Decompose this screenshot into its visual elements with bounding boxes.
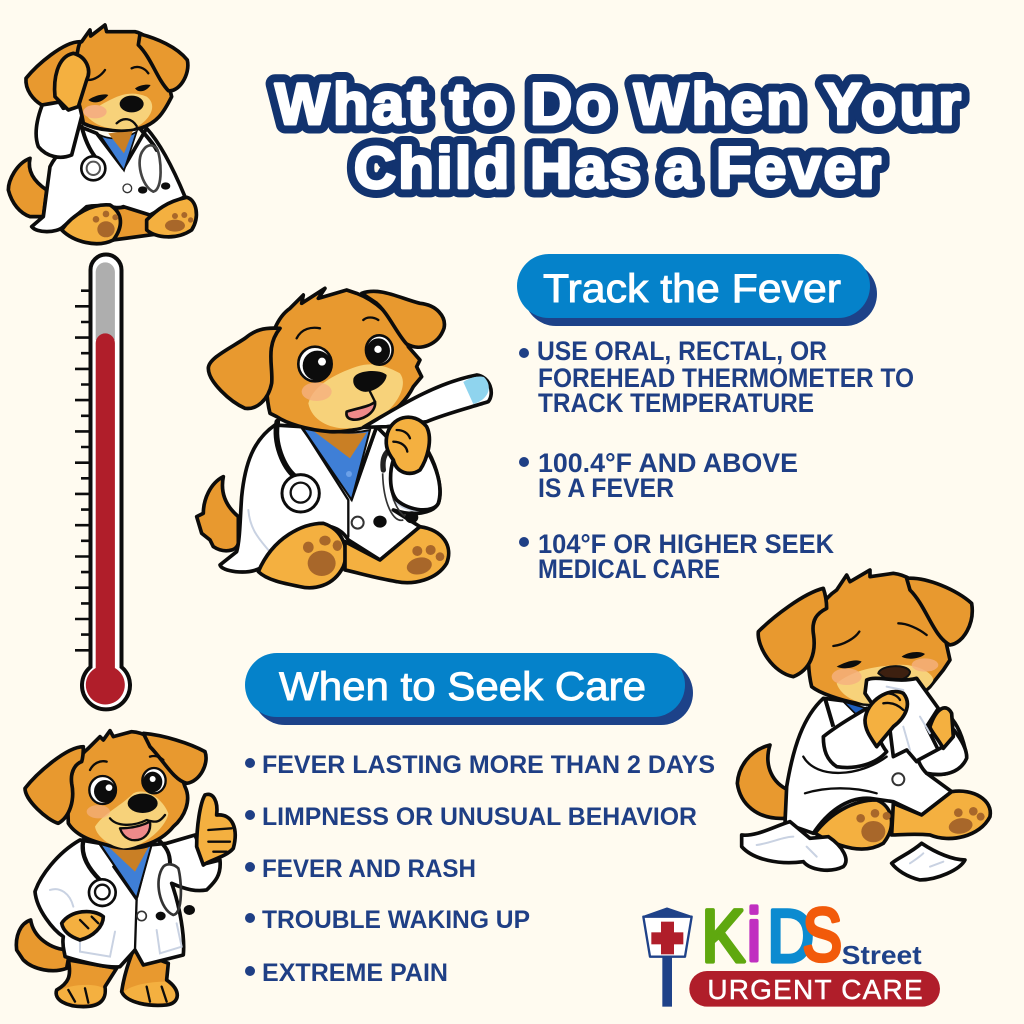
list: track the fever points: [519, 336, 914, 584]
wordmark: Kids: D: [767, 895, 814, 978]
list: track the fever points: IS A FEVER: [538, 473, 674, 503]
list: track the fever points: 104°F OR HIGHER SEEK: [538, 529, 834, 559]
title: Child Has a Fever: [354, 136, 881, 201]
list: when to seek care: [245, 751, 715, 987]
icon: sick puppy holding forehead: [8, 25, 196, 244]
wordmark: Kids: S: [803, 894, 842, 977]
heading: Track the Fever: [517, 254, 877, 326]
wordmark: Kids: K: [702, 895, 745, 978]
list: when to seek care: EXTREME PAIN: [262, 959, 448, 987]
logo: Kids Street Urgent Care: [643, 894, 940, 1007]
list: when to seek care: LIMPNESS OR UNUSUAL BEHAVIOR: [262, 803, 697, 831]
wordmark: Kids: i: [747, 894, 761, 977]
title: Child Has a Fever: [354, 136, 881, 201]
thermometer: [75, 254, 130, 709]
heading: When to Seek Care: When to Seek Care: [279, 665, 646, 709]
heading: When to Seek Care: [245, 653, 693, 725]
heading: Track the Fever: Track the Fever: [543, 267, 841, 311]
icon: happy puppy thumbs up: [16, 731, 235, 1007]
logo: Kids Street Urgent Care: URGENT CARE: [707, 974, 923, 1005]
title: What to Do When Your: [275, 72, 961, 137]
list: track the fever points: TRACK TEMPERATURE: [538, 388, 814, 418]
list: when to seek care: TROUBLE WAKING UP: [262, 906, 530, 934]
list: when to seek care: FEVER AND RASH: [262, 855, 476, 883]
list: when to seek care: FEVER LASTING MORE THAN 2 DAYS: [262, 751, 715, 779]
icon: street lamp with red cross: [643, 908, 692, 1007]
logo: Kids Street Urgent Care: Street: [842, 940, 922, 970]
list: track the fever points: USE ORAL, RECTAL, OR: [537, 336, 827, 366]
list: track the fever points: 100.4°F AND ABOVE: [538, 448, 798, 478]
wordmark: Kids: [702, 894, 842, 978]
list: track the fever points: MEDICAL CARE: [538, 554, 720, 584]
title: [275, 72, 961, 201]
list: track the fever points: FOREHEAD THERMOMETER TO: [538, 363, 914, 393]
icon: sick puppy blowing nose: [737, 570, 990, 880]
icon: puppy doctor with thermometer: [197, 288, 491, 588]
thermometer tick marks: [75, 291, 90, 650]
title: What to Do When Your: [275, 72, 961, 137]
